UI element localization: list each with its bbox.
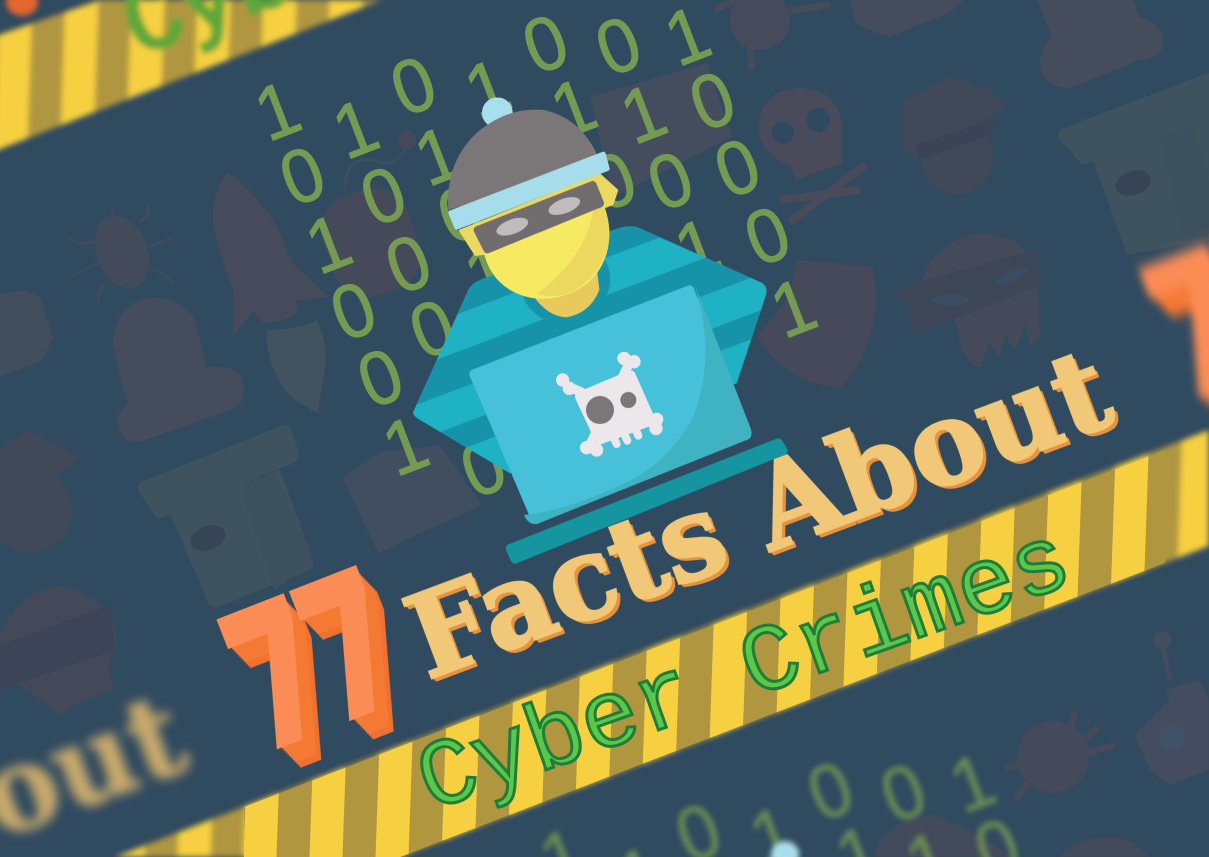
neck: [532, 267, 599, 317]
laptop base: [510, 443, 783, 559]
hazard tape: [244, 450, 1165, 857]
icon: spy left: [0, 430, 80, 552]
icon: ninja left: [0, 587, 117, 715]
icon: skull and crossbones: [556, 352, 663, 457]
blurred tape top left: [0, 0, 415, 153]
blurred tape ends: [115, 430, 1209, 857]
icon: box: [590, 63, 732, 197]
icon: ATM right: [1065, 80, 1209, 255]
hat band: [451, 154, 607, 227]
head sides: [458, 173, 618, 256]
icon: blurred lower icons: [875, 815, 1150, 857]
text: Cyber Crimes: Cyber Crimes: [404, 508, 1085, 838]
laptop screen: [474, 285, 752, 524]
icon: hat top: [850, 0, 963, 37]
icon: rocket: [213, 172, 328, 413]
face: [483, 203, 609, 299]
icon: splat: [715, 0, 830, 70]
binary digits: [243, 0, 827, 515]
hoodie: [413, 226, 766, 474]
icon: ninja right: [890, 233, 1040, 368]
blurred binary digits bottom: [528, 736, 1112, 857]
icon: blurred splat: [1005, 712, 1115, 800]
icon: blurred robot: [1135, 631, 1209, 785]
icon: skull and crossbones: [758, 88, 865, 222]
icon: shield: [757, 260, 877, 388]
blurred hat pom below: [771, 841, 799, 857]
hat: [448, 110, 600, 210]
icon: top hat: [1037, 0, 1163, 88]
icon: bug: [68, 206, 172, 302]
icon: bell: [113, 298, 244, 442]
icon: envelope: [343, 445, 482, 553]
number 77: 77: [198, 534, 423, 794]
mask: [478, 185, 600, 249]
text: Facts About: Facts About: [389, 321, 1128, 706]
icon: spy right: [902, 77, 1005, 194]
icon: bomb: [311, 131, 431, 307]
icon: ATM left: [145, 432, 313, 607]
icon: camera: [0, 291, 53, 377]
hat pom: [482, 97, 513, 128]
blurred orange corner: [6, 0, 38, 16]
hacker figure: [400, 90, 800, 559]
